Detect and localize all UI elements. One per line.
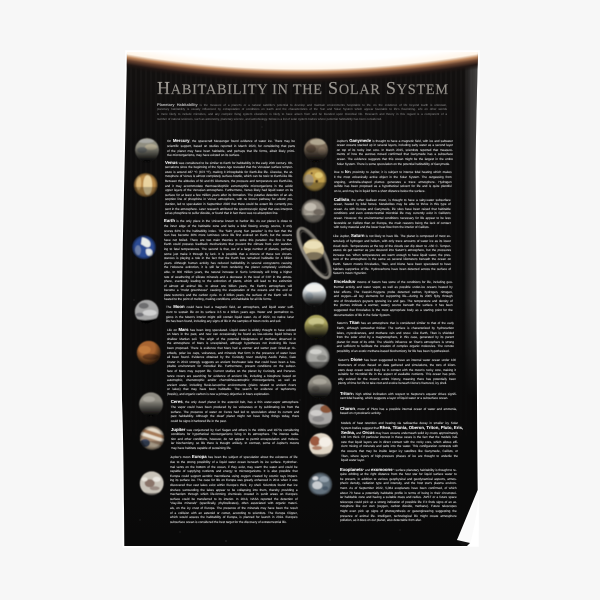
- text: Titan: planet for most of its orbit. The shield's influence on Titan's atmosphere is strong: [337, 340, 454, 344]
- planet: Saturn with rings: [292, 224, 336, 282]
- text: Mercury: of the planet may have been habitable, and perhaps that life forms, albeit likely primi-: [167, 149, 295, 153]
- planet: Tethys: [308, 375, 332, 399]
- text: Venus: ed as phosphine to sulfur dioxide, or found that in fact there was no absorption line.: [165, 211, 278, 215]
- text: icy moons models: cient mixing of minerals and salts into the water. This configuration contrasts with: [341, 444, 458, 448]
- planet: Venus: [134, 173, 158, 197]
- text: Ceres: surface. The presence of water on Ceres had led to speculation about its current and: [171, 410, 299, 414]
- text: Europa: als, on the icy crust of Europa. The presence of the minerals may have been the result: [170, 506, 298, 510]
- text: icy moons models: System bodies suggest that Rhea, Titania, Oberon, Triton, Pluto, Eris,: [341, 425, 463, 430]
- text: Ganymede: Solar System. There is some speculation on the potential habitability of Ganymede.: [337, 162, 450, 166]
- text: Exoplanets: pollution, as it does on our planet, also detectable from afar.: [340, 518, 421, 522]
- text: Exoplanets: quire orbiting at the right distance from the host star for liquid surface water to: [340, 472, 457, 476]
- text: Mars: ancient water, including fluvio-lacustrine environments (plains related to ancient rivers: [167, 383, 296, 387]
- text: Callisto: ocean, heated by tidal forces. Metabolites may be able to thrive in this type of: [334, 202, 451, 206]
- text: Charon: Charon, moon of Pluto has a possible internal ocean of water and ammonia,: [340, 406, 457, 411]
- text: Dione: ably existed for the moon's entire history, meaning there has potentially been: [338, 377, 456, 381]
- text: Moon: cient to sustain life on its surface 3.5 to 4 billion years ago. Water and permafrost re-: [166, 310, 294, 314]
- text: Moon: The Moon could have had a magnetic field, an atmosphere, and liquid water suffi-: [166, 304, 294, 309]
- text: Mars: on Mars in the past, and now can occasionally be found as low-volume liquid brines in: [167, 332, 296, 336]
- text: Enceladus: one of Enceladus's geysers spewing ice and gas. The temperature and density of: [334, 299, 453, 303]
- text: Jupiter: conditions for hypothetical microorganisms living in its atmosphere. The intense radia-: [171, 432, 299, 436]
- text: Titan: lakes, cryovolcanoes, and methane rain and snow. Like Earth, Titan is shielded: [337, 331, 454, 335]
- text: Saturn: Like Jupiter, Saturn is not likely to have life. The planet is composed of most ex-: [333, 233, 451, 238]
- text: Mars: (fossils), and organic carbon is now a primary objective in Mars exploration.: [167, 392, 270, 396]
- intro paragraph: is more likely to include microbes, and any complex living system elsewhere is likely to have arisen from and be founded upon microbial life. Research and theory in this regard is a component of a: [157, 112, 447, 116]
- text: Callisto: favorable on Callisto than on Europa, the main reasons being the lack of contact: [334, 221, 451, 225]
- text: icy moons models: 100 km thick. Of particular interest in these cases is the fact that the models indi-: [341, 435, 458, 439]
- text: Mars: face of Mars may support life. Current studies on the planet by Curiosity and Perseve-: [167, 369, 296, 373]
- text: Venus: Between the altitudes of 50 and 65 kilometers, the pressure and temperature are Earth-like,: [165, 179, 293, 183]
- text: Saturn: Saturn's moon Hyperion.: [333, 271, 367, 275]
- planet: Dione: [306, 345, 330, 369]
- text: Callisto: [334, 197, 451, 229]
- text: Dione: plenty of time for life to take root and evolve beneath Dione's fractured, icy shell.: [338, 381, 447, 385]
- text: Europa: which would assess the habitability of Europa, is planned for launch in 2024. Europa's: [170, 515, 298, 519]
- text: icy moons models: Sedna, and Orcus may have oceans underneath solid icy crusts approximately: [341, 430, 458, 435]
- text: Earth: the Holocene extinction, it is still far from rendering the planet completely uninhabit-: [164, 265, 292, 269]
- text: Ceres: past habitability. Although the dwarf planet might not have living things today, there: [171, 414, 299, 418]
- text: Mars: shallow Martian soil. The origin of the potential biosignature of methane observed in: [167, 337, 296, 341]
- text: icy moons models: the oceans that may be inside larger icy satellites like Ganymede, Callisto, or: [341, 449, 458, 453]
- text: Earth: Earth is the only place in the Universe known to harbor life. As our planet is close to: [164, 218, 292, 223]
- text: Europa: Jupiter's moon Europa has been the subject of speculation about the existence of life: [170, 454, 298, 459]
- text: Venus: duction, led to speculation in September 2020 that there could be extant life currently pre-: [165, 202, 293, 206]
- text: Moon: life has been found, including any signs of life in the samples of Moon rocks and soil.: [166, 319, 281, 323]
- text: Earth: heated to the point of melting, making conditions uninhabitable for all life forms.: [164, 297, 272, 301]
- text: Earth: Earth could possess feedback mechanisms that prevent the climate from ever wander-: [164, 242, 292, 246]
- text: Callisto: conditions and even extraterrestrial microbial life may currently exist in Callisto's: [334, 211, 451, 215]
- text: Ceres: Ceres, the only dwarf planet in the asteroid belt, has a thin water-vapor atmosphere.: [171, 399, 299, 404]
- text: Charon: [340, 406, 457, 415]
- planet: Charon: [307, 404, 333, 429]
- text: Earth: the inner edge of the habitable zone and lacks a tidal flowing energy source, it only: [164, 224, 292, 228]
- planet: Jupiter: [139, 426, 165, 450]
- text: Mars: Life on Mars has been long speculated. Liquid water is widely thought to have existed: [167, 327, 296, 332]
- intro paragraph: [157, 102, 447, 121]
- text: Venus: and it may accommodate thermoacidophilic extremophile microorganisms in the acidic: [165, 184, 293, 188]
- text: Earth: rate of weathering of silicate minerals and a decrease in the level of CO² in the atmos-: [164, 275, 292, 279]
- text: Jupiter: Jupiter was conjectured by Carl Sagan and others in the 1960s and 1970s considering: [171, 427, 299, 432]
- text: Ceres: could be signs it harbored life in the past.: [171, 419, 227, 423]
- text: Exoplanets: might even pick up signs of photosynthesis or geoengineering suggesting the: [340, 509, 457, 513]
- text: Dione: eters deep ocean would likely be in contact with the moon's rocky core, making it: [338, 368, 456, 372]
- curled poster corner: [457, 490, 479, 546]
- text: Mercury: scientific support, based on studies reported in March 2020, for considering that parts: [167, 144, 295, 148]
- text: Exoplanets: telescope could pick up a strong indication of possible life if it finds signs of an at-: [340, 500, 457, 504]
- text: Mars: been proposed. There is evidence that Mars had a warmer and wetter past: Dried-up riv-: [167, 346, 296, 350]
- text: icy moons models: [341, 421, 463, 462]
- text: Exoplanets: [340, 467, 457, 522]
- text: Venus: ature is around 467 °C (872 °F), making it inhospitable for Earth-like life. Likewise, the at-: [165, 170, 293, 174]
- text: Enceladus: and oxygen—all key elements for supporting life—during its 2005 flyby through: [334, 294, 453, 298]
- text: Ganymede: [336, 138, 453, 166]
- text: Europa: ing its surface ice. The case for life on Europa was greatly enhanced in 2011 when it was: [170, 478, 298, 482]
- planet: Titan: [304, 315, 328, 339]
- text: Enceladus: [334, 279, 453, 317]
- text: Mercury: tive microorganisms, may have existed on its surface.: [167, 153, 240, 157]
- text: Saturn: Earth. Saturn moons Enceladus, Titan, and Dione have been speculated to have: [333, 262, 451, 266]
- text: Venus: servations since the beginning of the Space Age revealed that the Venusian surface temper-: [165, 165, 293, 169]
- text: Saturn: tensively of hydrogen and helium, with only trace amounts of water ice as its lower: [333, 239, 451, 243]
- text: Callisto: ocean. However, the environmental conditions necessary for life appear to be less: [334, 216, 451, 220]
- text: Ganymede: ocean oceans stacked up in several layers, including salty water as a second layer: [337, 143, 453, 147]
- text: Jupiter: tion and other conditions, however, do not appear to permit encapsulation and molecu-: [171, 437, 299, 441]
- text: Europa: mechanism through which life-forming chemicals created in sunlit areas on Europa's: [170, 492, 298, 496]
- text: Earth: years. Although human activity has reduced habitability in several ecosystems causing: [164, 261, 292, 265]
- text: Ganymede: on top of its rocky iron core. In March 2015, scientists reported that measure-: [337, 148, 453, 152]
- text: Europa: capable of supplying nutrients and energy to microorganisms. It is also possible that: [170, 469, 298, 473]
- text: Europa: Europa could support aerobic macrofauna using oxygen created by cosmic rays impact-: [170, 474, 298, 478]
- text: Jupiter: lar biochemistry, so life there is thought unlikely. In contrast, some of Jupiter's moons: [171, 441, 299, 445]
- text: Earth: plate tectonics and the carbon cycle. In 4 billion years, the surface of the Earth will be: [164, 293, 292, 297]
- text: Ceres: The vapor could have been produced by ice volcanoes or by sublimating ice from the: [171, 405, 299, 409]
- text: Saturn: atures do get warmer as you descend into Saturn's atmosphere, but the pressures: [333, 248, 451, 252]
- text: Exoplanets: mosphere like our own (oxygen, carbon dioxide, methane). Future telescopes: [340, 504, 457, 508]
- text: Mars: pitable environment for microbial life. Furthermore, present conditions on the subsur-: [167, 364, 296, 368]
- text: Europa: discovered that vast lakes exist within Europa's thick, icy shell. Scientists found that ice: [170, 483, 298, 487]
- text: Io: it the most volcanically active object in the Solar System. The outgassing from: [334, 175, 452, 179]
- text: icy moons models: Titan, where layers of high-pressure phases of ice are thought to underlie the: [341, 454, 458, 458]
- text: Saturn: habitats supportive of life. Hydrocarbons have been detected across the surface of: [333, 267, 451, 271]
- text: Venus: sent in the atmosphere. Later research attributed the spectroscopic signal that was interpret-: [165, 207, 293, 211]
- text: Io: on Io, and may be in liquid form a short distance below the surface.: [334, 189, 425, 193]
- planet: Ceres: [139, 392, 163, 416]
- text: Venus: Venus was considered to be similar to Earth for habitability in the early 20th century. Ob-: [165, 160, 293, 165]
- text: Enceladus: the plumes indicate a warmer, watery source beneath the surface. It has been: [334, 303, 453, 307]
- planets: [132, 137, 334, 496]
- text: Earth: have not boiled. There are two main theories to solve this paradox: the first is that: [164, 238, 292, 242]
- text: Earth: scores 82% in the habitability index. The "faint young Sun paradox" is the fact that the: [164, 229, 292, 233]
- text: Europa: shelves surrounding the lakes appear to be collapsing into them, thereby providing a: [170, 488, 298, 492]
- text: Exoplanets: lar habitable zone and having a suitable mass and radius. JWST or a future space: [340, 495, 457, 499]
- text: Titan: possibility of an exotic methane-based biochemistry for life has been hypothesized.: [337, 349, 450, 353]
- text: Earth: [164, 218, 292, 301]
- intro paragraph: number of natural sciences, such as astronomy, planetary science, and astrobiology. Below is a list of solar system bodies where potential habitability has been considered.: [157, 117, 382, 121]
- text: Enceladus: Enceladus' moons of Saturn has some of the conditions for life, including geo-: [334, 279, 453, 284]
- text: icy moons models: Models of heat retention and heating via radioactive decay in smaller icy Solar: [341, 421, 458, 425]
- text: Earth: of almost all animal life. In about one billion years, the Earth's atmosphere will: [164, 284, 292, 288]
- text: Earth: phere, eventually leading to the extinction of plants, which will lead to the extinction: [164, 279, 292, 283]
- text: Earth: Sun has become 30% more luminous since life first evolved on Earth, but the oceans: [164, 233, 292, 237]
- text: Jupiter: may have habitats capable of sustaining life.: [171, 446, 231, 450]
- text: Enceladus: tidal effects. The Cassini-Huygens probe detected carbon, hydrogen, nitrogen,: [334, 290, 453, 294]
- text: Callisto: ocean. As with Europa and Ganymede, life sites have been raised that habitable: [334, 207, 451, 211]
- planet: Moon: [134, 300, 160, 325]
- title: HABITABILITY IN THE SOLAR SYSTEM: [157, 78, 448, 98]
- text: Mars: all been found. Evidence obtained by the Curiosity rover studying Aeolis Palus, Gale: [167, 355, 296, 359]
- text: Titan: from the solar wind by a magnetosphere, in this case, generated by its parent: [337, 335, 454, 339]
- text: Moon: [166, 304, 294, 323]
- text: Io: Due to Io's proximity to Jupiter, it is subject to intense tidal heating which makes: [334, 169, 452, 174]
- text: Triton: cant tidal heating, which suggests a layer of liquid water or a subsurface ocean.: [340, 396, 448, 400]
- text: Exoplanets: be present, in addition to various geophysical and geodynamical aspects, atmos-: [340, 477, 457, 481]
- planet: Earth: [132, 235, 156, 259]
- text: icy moons models: liquid water layer.: [341, 458, 365, 462]
- planet: exoplanet: [307, 472, 333, 497]
- text: Venus: [165, 160, 293, 215]
- text: Earth: able. In 600 million years, the natural increase in Sun's luminosity will bring a higher: [164, 270, 292, 274]
- text: Enceladus: suggested that Enceladus is the most appropriate body as a starting point for the: [334, 308, 453, 312]
- text: Dione: kilometers of crust. Based on data gathered and simulations, the tons of kilom-: [338, 363, 456, 367]
- text: Exoplanets: Exoplanets° and exomoons°: surface planetary habitability is thought to re-: [340, 467, 457, 472]
- text: Ganymede: Jupiter's Ganymede is thought to have a magnetic field, with ice and saltwater: [337, 138, 453, 143]
- text: Europa: mal vents on the bottom of the ocean, if they exist, may warm the water and could be: [170, 465, 298, 469]
- planet: Mercury: [135, 138, 159, 162]
- text: Earth: some just make it through by luck. It is possible that a mixture of these two circum-: [164, 252, 292, 256]
- text: Callisto: with rocky material and the lower heat flow from the interior of Callisto.: [334, 225, 429, 229]
- text: Europa: of a collision with an asteroid or comet, according to scientists. The Europa Clipper,: [170, 511, 298, 515]
- text: Dione: [338, 357, 456, 385]
- planet: Pluto: [308, 433, 334, 458]
- planet: Io: [303, 167, 327, 191]
- text: Titan: Earth, although somewhat thicker. The surface is characterized by hydrocarbon: [337, 326, 454, 330]
- text: Mars: rance rovers are searching for evidence of ancient life, including a biosphere based on: [167, 374, 296, 378]
- text: Titan: and sufficient to facilitate the creation of complex organic molecules. The remote: [337, 344, 454, 348]
- text: Europa: [170, 454, 298, 524]
- text: Exoplanets: about 70 have a potentially habitable profile in terms of being in their circumstel-: [340, 491, 457, 495]
- text: Saturn: increase too. When temperatures are warm enough to have liquid water, the pres-: [333, 253, 451, 257]
- text: Europa: "clay-like minerals" (specifically, phyllosilicates), often associated with organic materi-: [170, 501, 298, 505]
- text: Exoplanets: pheric density, radiation type and intensity, and the host star's plasma environ-: [340, 481, 457, 485]
- text: Venus: surface for at least a few million years after its formation. The putative detection of an ab-: [165, 193, 293, 197]
- text: Enceladus: documentation of life in the Solar System.: [334, 313, 390, 317]
- text: Venus: mosphere of Venus is almost completely surface-hostile, which can be toxic to Earth-like life.: [165, 174, 293, 178]
- planet: Mars: [137, 341, 161, 365]
- text: Titan: [336, 320, 454, 353]
- text: Mars: Crater in 2013 strongly suggests an ancient freshwater lake that could have been a hos-: [167, 360, 296, 364]
- intro paragraph: planetary habitability is usually influenced by extrapolation of conditions on Earth and the characteristics of the Sun and Solar System which appear favorable to life's flourishing. Life on other worlds: [157, 107, 447, 111]
- text: Moon: gions in the Moon's interior might still contain liquid water. As of 2022, no native lunar: [166, 315, 294, 319]
- text: Exoplanets: ment. As of September 2022, 5,084 exoplanets have been confirmed, of which: [340, 486, 457, 490]
- text: Mars: [167, 327, 296, 396]
- text: Venus: upper layers of the Venusian atmosphere. Furthermore, Venus likely had liquid water on its: [165, 188, 293, 192]
- text: Ceres: [170, 399, 300, 423]
- text: Europa: surface could be transferred to its interior. In 2013, NASA reported the detection of: [170, 497, 298, 501]
- text: Triton: Triton's high orbital inclination with respect to Neptune's equator drives signifi-: [340, 391, 457, 396]
- text: Europa: due to the strong possibility of a liquid water ocean beneath its ice surface. Hydrother-: [170, 460, 298, 464]
- text: Ganymede: ocean. The evidence suggests that this ocean might be the largest in the entire: [337, 157, 453, 161]
- text: Charon: based on cryovolcanic activity.: [340, 411, 381, 415]
- text: Mars: erbeds, polar ice caps, volcanoes, and minerals that form in the presence of water have: [167, 351, 296, 355]
- text: Titan: Saturn's Titan has an atmosphere that is considered similar to that of the early: [337, 320, 454, 325]
- text: Mars: the atmosphere of Mars is unexplained, although hypotheses not involving life have: [167, 341, 296, 345]
- text: Saturn: cloud deck. Temperatures at the top of the clouds can dip down to -150 C. Temper-: [333, 244, 451, 248]
- text: Io: ongoing, umbrella-shaped plumes generates a trace atmosphere. Hydrogen: [334, 180, 452, 184]
- intro paragraph: Planetary Habitability is the measure of a planet's or a natural satellite's potential to develop and maintain environments hospitable to life. As the existence of life beyond Earth is unknown,: [157, 102, 447, 107]
- text: Ganymede: ments of how the auroras moved confirmed that Ganymede has a subsurface: [337, 152, 453, 156]
- text: Io: sulfide has been proposed as a hypothetical solvent for life and is quite plentiful: [334, 184, 452, 188]
- text: Earth: stances is playing a role in the fact that the Earth has remained habitable for 4 billion: [164, 256, 292, 260]
- text: Jupiter: [171, 427, 299, 450]
- text: Saturn: [333, 233, 451, 275]
- text: Earth: ing to fatal temperatures. The second is that, out of a large number of planets, perhaps: [164, 247, 292, 251]
- text: icy moons models: cate that liquid layers are in direct contact with the rocky core, which allows effi-: [341, 440, 458, 444]
- text: Callisto: Callisto, the other Galilean moon, is thought to have a salty-water subsurface: [334, 197, 451, 202]
- planet: Ganymede: [304, 138, 328, 162]
- planet: Callisto: [301, 199, 325, 223]
- text: Europa: subsurface ocean is considered the best target for the discovery of extraterrestrial life.: [170, 520, 287, 524]
- text: Saturn: sure of the atmosphere is the same as several kilometers beneath the ocean on: [333, 257, 451, 261]
- text: Triton: [340, 391, 457, 400]
- planet: Enceladus: [302, 282, 326, 306]
- text: Mars: or lakes) that may have been habitable. The search for evidence of taphonomy: [167, 387, 296, 391]
- text: Exoplanets: presence of animal life. Intelligent, technological life might create atmosphere: [340, 514, 457, 518]
- poster background: [122, 52, 478, 546]
- text: Mars: autotrophic, chemotrophic and/or chemolithoautotrophic microorganisms, as well as: [167, 378, 296, 382]
- text: Mercury: [167, 138, 295, 157]
- text: Mercury: On Mercury, the spacecraft Messenger found evidence of water ice. There may be: [167, 138, 295, 143]
- text: Earth: become a "moist greenhouse" causing the evaporation of the oceans and the end of: [164, 288, 292, 292]
- text: Enceladus: thermal activity and water vapor, as well as possible under-ice oceans heated by: [334, 285, 453, 289]
- text: Io: [334, 169, 452, 193]
- planet: Europa: [139, 471, 165, 496]
- text: Dione: suitable for microbial life in the aspect of available nutrients. This ocean has prob-: [338, 372, 456, 376]
- text: Venus: sorption line of phosphine in Venus' atmosphere, with no known pathway for abiotic pro-: [165, 197, 293, 201]
- text: Dione: Saturn's Dione has been suggested to have an internal water ocean under 100: [338, 357, 456, 362]
